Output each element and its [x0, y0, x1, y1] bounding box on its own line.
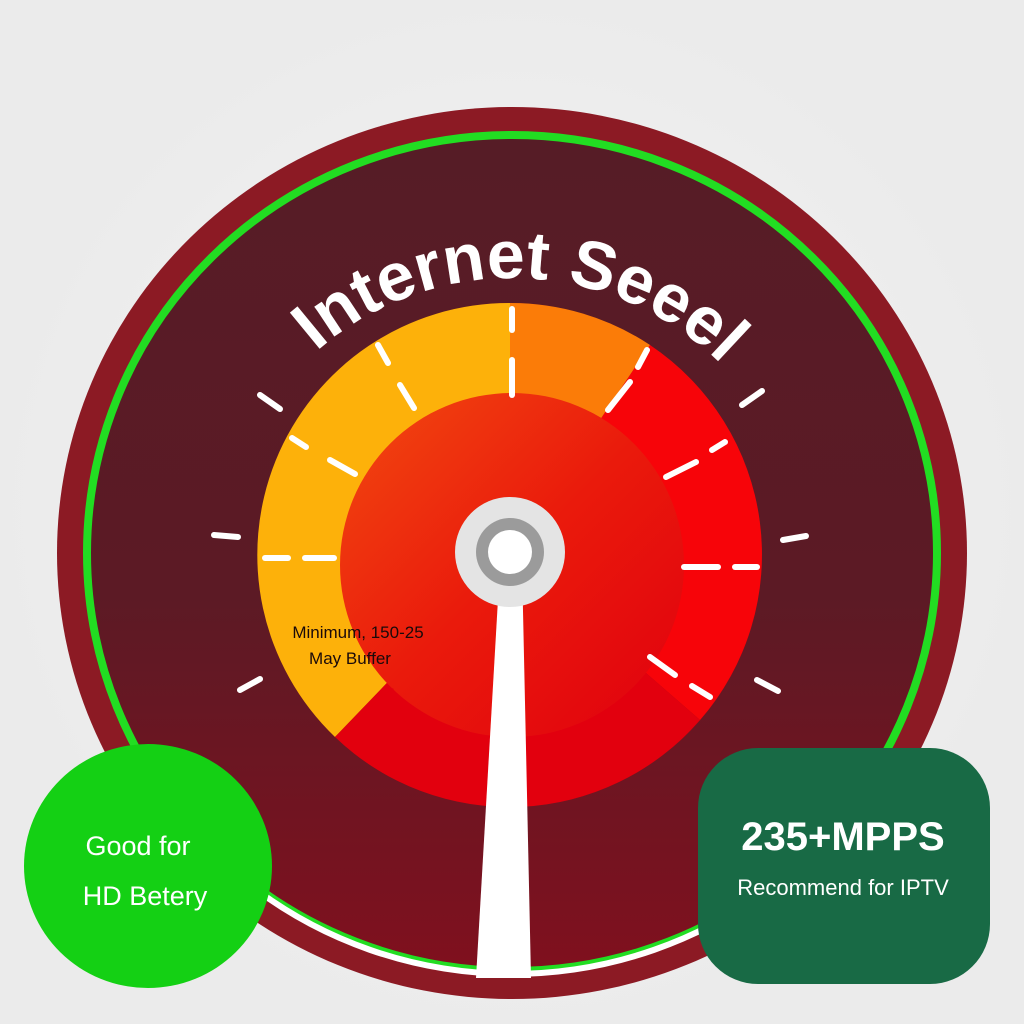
badge: good for HD: Good for: [85, 831, 191, 861]
tick marks: [214, 309, 806, 697]
gauge: [257, 303, 762, 807]
gauge label: [292, 623, 424, 668]
badge: 235+ MPPS: Recommend for IPTV: [737, 875, 949, 900]
badge: 235+ MPPS: 235+MPPS: [741, 815, 945, 859]
title: Internet Seeel: [290, 234, 752, 362]
badge: good for HD: HD Betery: [83, 881, 208, 911]
gauge label: Minimum, 150-25: [292, 623, 424, 642]
badge: 235+ MPPS: [698, 748, 990, 984]
needle: [476, 565, 531, 978]
needle hub: [455, 497, 565, 607]
dial: outer circle: [57, 107, 967, 999]
gauge label: May Buffer: [309, 649, 391, 668]
badge: good for HD: [24, 744, 272, 988]
